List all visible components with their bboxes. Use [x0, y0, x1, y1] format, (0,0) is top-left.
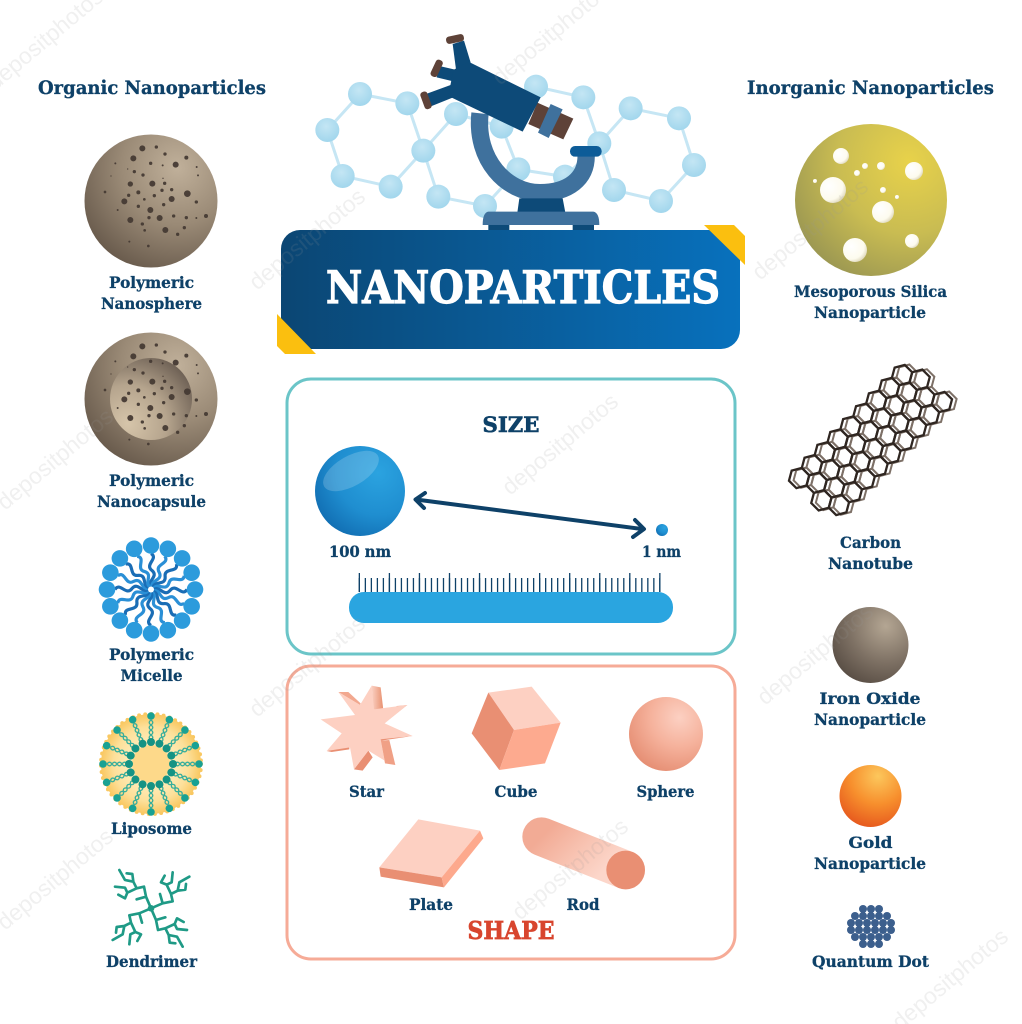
label: mesoporous silica nanoparticle: Mesoporous Silica: [794, 282, 947, 301]
heading: inorganic nanoparticles: Inorganic Nanoparticles: [747, 77, 994, 99]
particle: carbon nanotube: [785, 352, 960, 573]
label: mesoporous silica nanoparticle: [794, 282, 947, 322]
particle: gold: [814, 765, 926, 873]
label: iron oxide nanoparticle: Nanoparticle: [814, 710, 926, 729]
arrow: scale between spheres: [416, 493, 644, 537]
particle: liposome: [99, 712, 203, 838]
label: carbon nanotube: Carbon: [840, 533, 901, 552]
label: cube: Cube: [494, 782, 538, 801]
label: plate: Plate: [409, 895, 453, 914]
label: carbon nanotube: [828, 533, 913, 573]
label: polymeric nanocapsule: [97, 471, 206, 511]
label: 100 nm: 100 nm: [329, 542, 392, 561]
label: gold nanoparticle: Nanoparticle: [814, 854, 926, 873]
shape: star: [321, 686, 413, 771]
label: polymeric micelle: [109, 645, 194, 685]
watermark: depositphotos: [244, 183, 370, 295]
label: polymeric nanocapsule: Nanocapsule: [97, 492, 206, 511]
label: star: Star: [349, 782, 385, 801]
particle: polymeric nanocapsule: [84, 332, 218, 511]
title: NANOPARTICLES: [326, 261, 720, 314]
icon: 1 nm sphere: [656, 524, 668, 536]
heading: organic nanoparticles: Organic Nanoparticles: [38, 77, 266, 99]
panel: shape: [287, 666, 735, 959]
label: 1 nm: 1 nm: [642, 542, 682, 561]
label: sphere: Sphere: [636, 782, 695, 801]
banner: nanoparticles title: [277, 225, 745, 354]
heading: shape: SHAPE: [468, 916, 554, 945]
shape: sphere: [629, 697, 703, 771]
panel: size: [287, 379, 735, 654]
label: dendrimer: Dendrimer: [106, 952, 198, 971]
label: iron oxide nanoparticle: [814, 689, 926, 729]
particle: dendrimer: [106, 870, 198, 971]
label: rod: Rod: [566, 895, 600, 914]
particle: quantum dot: [812, 905, 930, 971]
particle: polymeric nanosphere: [84, 134, 218, 313]
label: polymeric nanosphere: Polymeric: [109, 273, 194, 292]
label: gold nanoparticle: Gold: [848, 833, 893, 852]
icon: 100 nm sphere: [315, 443, 405, 536]
watermark: depositphotos: [507, 813, 633, 925]
label: carbon nanotube: Nanotube: [828, 554, 913, 573]
label: polymeric micelle: Polymeric: [109, 645, 194, 664]
shape: plate: [379, 819, 483, 887]
label: quantum dot: Quantum Dot: [812, 952, 930, 971]
label: mesoporous silica nanoparticle: Nanoparticle: [814, 303, 926, 322]
watermark: depositphotos: [752, 598, 878, 710]
label: polymeric nanosphere: [101, 273, 202, 313]
label: polymeric micelle: Micelle: [120, 666, 183, 685]
icon: microscope: [419, 34, 602, 230]
icon: molecular hexagon network: [315, 75, 706, 218]
heading: size: SIZE: [482, 412, 540, 437]
label: polymeric nanocapsule: Polymeric: [109, 471, 194, 490]
label: polymeric nanosphere: Nanosphere: [101, 294, 202, 313]
shape: rod: [542, 837, 645, 889]
watermark: depositphotos: [747, 173, 873, 285]
label: liposome: Liposome: [111, 819, 192, 838]
label: iron oxide nanoparticle: Iron Oxide: [820, 689, 921, 708]
ruler: [349, 582, 673, 623]
shape: cube: [472, 687, 561, 770]
particle: polymeric micelle: [99, 537, 203, 685]
particle: mesoporous silica: [794, 124, 947, 322]
watermark: depositphotos: [244, 610, 370, 722]
watermark: depositphotos: [497, 388, 623, 500]
label: gold nanoparticle: [814, 833, 926, 873]
particle: iron oxide: [814, 607, 926, 729]
